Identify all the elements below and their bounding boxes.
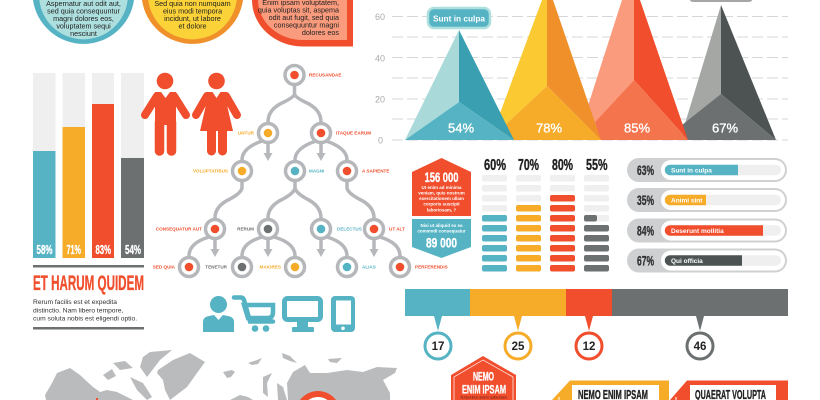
chart: decision tree: RERUM [237, 226, 254, 232]
chart: decision tree: ITAQUE EARUM [336, 130, 371, 136]
bar chart: vertical percentages: 54% [125, 243, 141, 257]
pyramid: yellow 78%: 78% [536, 120, 562, 136]
pyramid: gray 67% [680, 5, 776, 140]
heading block: et harum quidem [33, 265, 144, 330]
panel: teal circle callout: magni dolores eos, [53, 14, 114, 23]
map marker: red ring [300, 391, 336, 400]
panel: red rounded callout: dolores eos [302, 28, 339, 37]
chart: decision tree: ALIAS [362, 264, 376, 270]
panel: red rounded callout: odit aut fugit, sed quia [269, 13, 339, 22]
iceland [223, 370, 235, 378]
heading block: et harum quidem: Rerum facilis est et expedita [33, 299, 117, 306]
callout: nemo enim ipsam hexagon: Temporibus autem quibusdam [460, 396, 507, 400]
callout: nemo enim ipsam hexagon [451, 356, 516, 400]
panel: red rounded callout: consequuntur magni [274, 20, 339, 30]
pill: 63%: Sunt in culpa [671, 168, 712, 174]
callout: 156 000 hexagon: Ut enim ad minima [421, 185, 462, 190]
chart: decision tree: A SAPIENTE [362, 168, 389, 174]
scandinavia [263, 373, 287, 400]
pill: 63%: 63% [637, 162, 654, 178]
callout: nemo enim ipsam hexagon: NEMO [473, 370, 494, 384]
gridlines and axis: 0 [378, 136, 383, 146]
callout: 89 000 hexagon: 89 000 [426, 234, 457, 250]
heading block: et harum quidem: cum soluta nobis est eligendi optio. [33, 316, 137, 322]
pyramid: yellow 78% [490, 0, 601, 140]
callout: 156 000 hexagon: 156 000 [424, 169, 459, 185]
icon: monitor [284, 298, 320, 332]
europe [230, 395, 253, 400]
chart: segmented columns: 60% [484, 157, 506, 174]
bar chart: vertical percentages: 83% [96, 243, 111, 257]
panel: teal circle callout: sed quia consequuntur [47, 6, 120, 16]
chart: stacked bar with markers: 25 [512, 341, 525, 353]
icon: man [145, 73, 186, 151]
callout: 156 000 hexagon [412, 158, 471, 216]
panel: teal circle callout: voluptatem sequi [56, 22, 111, 30]
chart: decision tree: TENETUR [205, 264, 228, 270]
bar chart: vertical percentages [33, 73, 144, 258]
callout: 156 000 hexagon: laboriosam, ? [427, 208, 456, 212]
callout: 156 000 hexagon: veniam, quis nostrum [418, 191, 465, 196]
icon: woman [196, 73, 237, 151]
chart: decision tree: VOLUPTATIBUS [193, 168, 228, 174]
panel: orange circle callout: incidunt, ut labore [164, 14, 221, 23]
chart: stacked bar with markers: 46 [694, 341, 706, 353]
pyramid: teal 54% [405, 30, 514, 140]
bar chart: vertical percentages: 58% [36, 243, 52, 257]
panel: orange circle callout [142, 0, 243, 44]
chart: decision tree: SED QUIA [153, 264, 176, 270]
label: gray tag [690, 0, 752, 2]
callout: 89 000 hexagon [412, 219, 471, 258]
chart: stacked bar with markers: 12 [583, 341, 595, 353]
pill: 67%: Qui officia [671, 258, 703, 265]
gridlines and axis [375, 12, 788, 146]
chart: decision tree: RECUSANDAE [309, 72, 341, 78]
chart: decision tree: MAGNI [309, 168, 324, 174]
map marker: small red dot [96, 398, 98, 400]
label: sunt in culpa: Sunt in culpa [433, 14, 485, 24]
chart: segmented columns: 55% [586, 157, 608, 174]
chart: decision tree: UNTUR [238, 130, 255, 136]
tag: quaerat volupta [670, 380, 788, 400]
chart: horizontal pill bars [627, 158, 787, 272]
north america [45, 368, 133, 400]
gridlines and axis: 40 [375, 54, 385, 64]
russia and asia [287, 365, 397, 400]
callout: 89 000 hexagon: Nisi ut aliquid ex ea [420, 223, 463, 228]
gridlines and axis: 60 [375, 12, 385, 22]
chart: stacked bar with markers: 17 [432, 341, 444, 353]
callout: 89 000 hexagon: commodi consequatur [417, 228, 466, 234]
chart: world map [45, 350, 397, 400]
chart: decision tree: DELECTUS [337, 226, 362, 232]
pill: 35%: Animi sint [671, 198, 703, 204]
heading block: et harum quidem: ET HARUM QUIDEM [33, 272, 144, 295]
chart: segmented columns [482, 157, 609, 272]
chart: segmented columns: 80% [552, 157, 573, 174]
greenland [157, 353, 205, 400]
pyramid: red 85%: 85% [624, 120, 650, 136]
pill: 84% [627, 218, 787, 242]
panel: red rounded callout [252, 0, 353, 46]
heading block: et harum quidem: distinctio. Nam libero tempore, [33, 308, 123, 314]
chart: decision tree: MAIORES [260, 264, 281, 270]
arctic islands [103, 350, 172, 400]
panel: orange circle callout: et dolore [179, 22, 206, 30]
callout: 156 000 hexagon: exercitationem ullam [419, 196, 464, 201]
pill: 63% [627, 158, 787, 182]
pyramid: gray 67%: 67% [712, 120, 738, 136]
icon: user [203, 296, 234, 332]
chart: decision tree: PERFERENDIS [415, 264, 448, 270]
chart: stacked bar with markers [405, 289, 788, 359]
pyramid: teal 54%: 54% [448, 120, 474, 136]
gridlines and axis: 20 [375, 94, 385, 104]
pill: 67%: 67% [637, 252, 654, 268]
tag: nemo enim ipsam [552, 380, 669, 400]
icon: smartphone [331, 296, 355, 332]
panel: teal circle callout: nesciunt [70, 29, 97, 38]
chart: decision tree: UT ALT [389, 226, 405, 232]
panel: orange circle callout: eius modi tempora [163, 6, 222, 16]
label: sunt in culpa [428, 8, 490, 28]
chart: segmented columns: 70% [518, 157, 539, 174]
pill: 67% [627, 248, 787, 272]
callout: 156 000 hexagon: corporis suscipit [423, 202, 460, 206]
panel: teal circle callout [33, 0, 134, 44]
arctic russia islands [248, 353, 342, 365]
chart: decision tree: CONSEQUATUR AUT [156, 226, 202, 232]
pill: 35% [627, 188, 787, 212]
bar chart: vertical percentages: 71% [66, 243, 81, 257]
chart: decision tree [153, 66, 448, 276]
icon: shopping cart [234, 298, 273, 332]
chart: pyramid chart [375, 0, 788, 146]
pill: 84%: Deserunt mollitia [671, 228, 724, 235]
pyramid: red 85% [577, 0, 688, 140]
panel: red rounded callout: quia voluptas sit, aspema [258, 6, 339, 14]
pill: 84%: 84% [637, 222, 654, 238]
callout: nemo enim ipsam hexagon: ENIM IPSAM [462, 382, 506, 396]
pill: 35%: 35% [637, 192, 654, 208]
